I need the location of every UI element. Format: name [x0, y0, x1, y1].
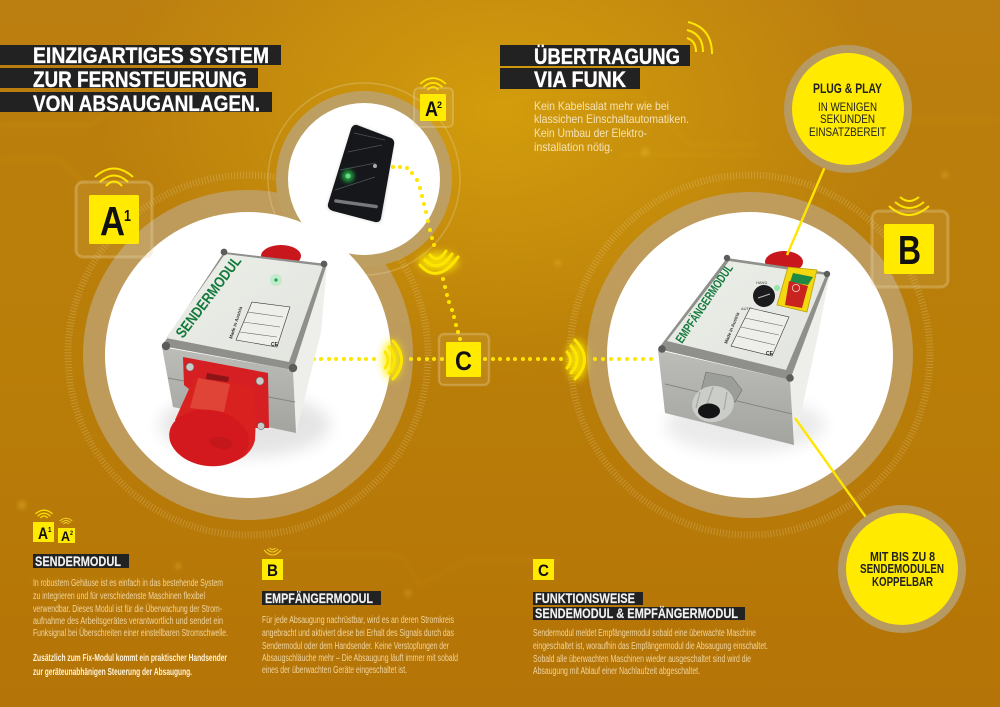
badge: A1: A	[100, 198, 125, 244]
title: right: ÜBERTRAGUNG	[534, 44, 680, 69]
green label: SENDERMODUL	[173, 253, 245, 341]
heading: EMPFÄNGERMODUL	[265, 590, 373, 606]
callout: plug and play	[784, 45, 912, 173]
badge: C	[439, 334, 489, 385]
title: left: EINZIGARTIGES SYSTEM	[33, 43, 269, 68]
body text	[33, 578, 228, 678]
body text: zu integrieren und für verschiedenste Maschinen flexibel	[33, 591, 205, 602]
heading: SENDERMODUL	[35, 553, 121, 569]
red CEE plug	[165, 357, 269, 471]
left white circle	[105, 212, 391, 498]
body text: Funksignal bei Überschreiten einer einstellbaren Stromschwelle.	[33, 627, 228, 639]
small badges A1 A2: A	[61, 528, 70, 544]
body text: eines der überwachten Geräte eingeschaltet ist.	[262, 665, 407, 676]
body text: Sendermodul meldet Empfängermodul sobald eine überwachte Maschine	[533, 628, 756, 639]
knob: AUTO	[741, 306, 752, 311]
green label: EMPFÄNGERMODUL	[672, 261, 736, 346]
heading: FUNKTIONSWEISE	[535, 590, 635, 606]
small badges A1 A2: A	[38, 524, 48, 543]
small badges A1 A2: 2	[70, 531, 74, 537]
body text: eingeschaltet ist, woraufhin das Empfängermodul die Absaugung einschaltet.	[533, 641, 768, 652]
device: Sendermodul	[160, 245, 330, 471]
body text: verwendbar. Dieses Modul ist für die Überwachung der Strom-	[33, 603, 222, 615]
cable gland	[689, 372, 742, 425]
callout: plug and play: IN WENIGEN	[818, 100, 877, 114]
right device ring	[570, 175, 930, 535]
body text: Absaugung mit Ablauf einer Nachlaufzeit abgeschaltet.	[533, 666, 700, 677]
callout: plug and play: PLUG & PLAY	[813, 81, 882, 96]
title: left: VON ABSAUGANLAGEN.	[33, 91, 260, 116]
badge: A2: 2	[437, 100, 442, 110]
knob: HAND	[756, 280, 767, 285]
badge: A1: 1	[124, 208, 131, 225]
red dome behind	[765, 251, 803, 273]
type plate: CE	[766, 351, 774, 357]
callout line: plug and play	[787, 162, 827, 255]
left device ring	[68, 175, 428, 535]
radio link C with dots and waves	[312, 165, 653, 380]
callout: koppelbar	[838, 505, 966, 633]
device: Empfaengermodul	[658, 251, 830, 453]
callout: plug and play: EINSATZBEREIT	[809, 125, 887, 139]
heading: SENDEMODUL & EMPFÄNGERMODUL	[535, 605, 738, 621]
body text	[262, 615, 458, 676]
section: Empfaengermodul	[262, 548, 458, 676]
intro text: klassichen Einschaltautomatiken.	[534, 112, 689, 126]
badge: B	[872, 197, 948, 287]
small badges A1 A2	[33, 510, 75, 544]
type plate: CE	[271, 342, 279, 348]
red dome behind	[261, 245, 301, 267]
device: handheld transmitter	[328, 125, 394, 222]
badge: A2: A	[425, 98, 438, 121]
title: right: VIA FUNK	[534, 67, 626, 92]
body text	[533, 628, 768, 677]
callout: koppelbar: MIT BIS ZU 8	[870, 550, 935, 564]
title: left	[0, 43, 281, 116]
switch	[777, 267, 817, 312]
status LED	[270, 274, 282, 286]
body text: zur geräteunabhänigen Steuerung der Absaugung.	[33, 667, 192, 678]
right white circle	[607, 212, 893, 498]
badge: C: C	[455, 346, 472, 376]
badge: A1	[76, 168, 152, 257]
callout: koppelbar: SENDEMODULEN	[860, 562, 944, 576]
intro text: installation nötig.	[534, 140, 613, 154]
callout line: koppelbar	[795, 418, 870, 523]
callout: koppelbar: KOPPELBAR	[872, 575, 933, 589]
badge: B: B	[898, 227, 921, 273]
title: right	[500, 44, 690, 92]
intro text: Kein Kabelsalat mehr wie bei	[534, 99, 669, 113]
type plate: Made in Austria	[228, 306, 243, 339]
icon: radio waves at title	[687, 22, 712, 54]
title: left: ZUR FERNSTEUERUNG	[33, 67, 247, 92]
callout: plug and play: SEKUNDEN	[820, 112, 875, 126]
heading	[533, 590, 745, 621]
knob	[741, 280, 780, 311]
handheld circle ring	[268, 83, 460, 275]
body text: Zusätzlich zum Fix-Modul kommt ein praktischer Handsender	[33, 653, 227, 664]
intro text: Kein Umbau der Elektro-	[534, 126, 647, 140]
small badge B: B	[267, 561, 278, 580]
section: Sendermodul	[33, 510, 228, 678]
type plate	[228, 302, 290, 348]
small badge B	[262, 548, 283, 580]
body text: Sobald alle überwachten Maschinen wieder ausgeschaltet sind wird die	[533, 654, 751, 665]
intro text	[534, 99, 689, 154]
badge: A2	[414, 78, 453, 127]
small badges A1 A2: 1	[48, 527, 52, 534]
body text: Absaugschläuche mehr – Die Absaugung läuft immer mit sobald	[262, 653, 458, 664]
handheld white circle	[288, 103, 440, 255]
small badge C: C	[538, 561, 549, 580]
type plate	[723, 308, 789, 357]
body text: Sendermodul oder dem Handsender. Keine Verstopfungen der	[262, 641, 449, 652]
small badge C	[533, 559, 554, 580]
body text: angebracht und aktiviert diese bei Erhalt des Signals durch das	[262, 628, 454, 639]
body text: aufnahme des Arbeitsgerätes verantwortlich und sendet ein	[33, 616, 223, 627]
body text: Für jede Absaugung nachrüstbar, wird es an deren Stromkreis	[262, 615, 454, 626]
section: Funktionsweise	[533, 559, 768, 677]
body text: In robustem Gehäuse ist es einfach in das bestehende System	[33, 578, 223, 589]
type plate: Made in Austria	[723, 311, 741, 344]
